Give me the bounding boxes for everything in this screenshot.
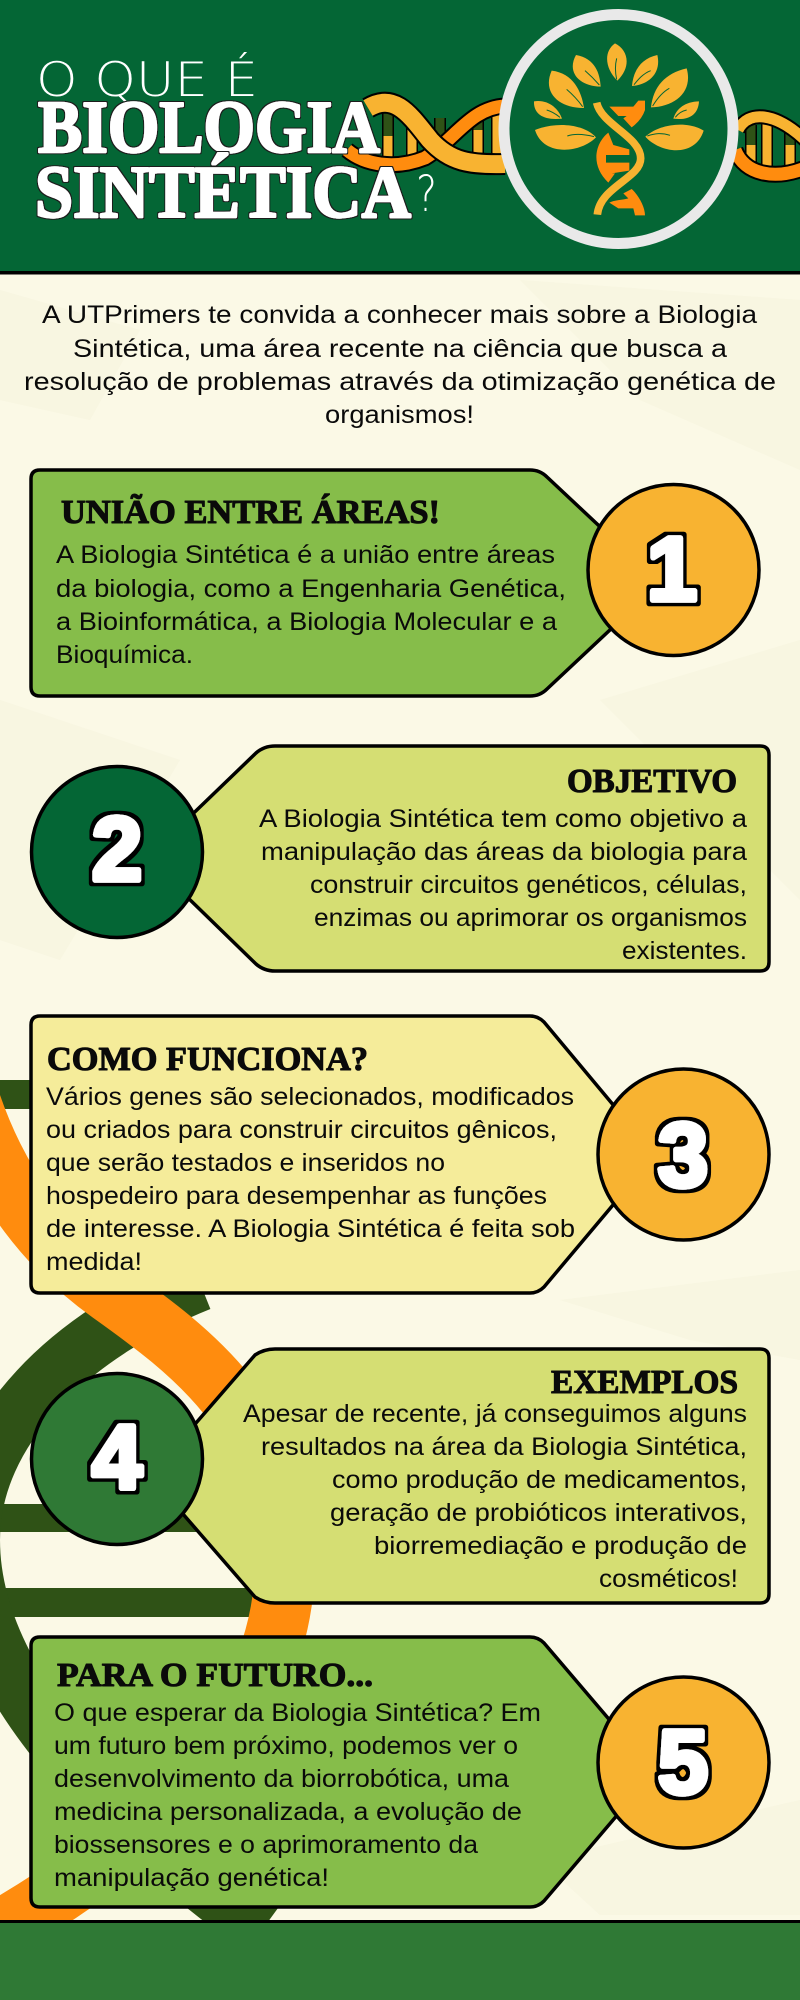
title <box>35 53 437 234</box>
panel 5: para o futuro <box>31 1637 769 1907</box>
number badge 3 <box>598 1069 769 1240</box>
body text 2: construir circuitos genéticos, células, <box>310 871 747 899</box>
body text 2: enzimas ou aprimorar os organismos <box>314 904 747 932</box>
panel 2: objetivo <box>32 746 769 971</box>
body text 4: resultados na área da Biologia Sintética, <box>261 1433 747 1461</box>
intro text: A UTPrimers te convida a conhecer mais sobre a Biologia <box>42 301 757 329</box>
body text 5: manipulação genética! <box>54 1864 329 1892</box>
body text 1 <box>56 541 566 669</box>
panel 1: união entre áreas <box>31 470 759 696</box>
body text 3: de interesse. A Biologia Sintética é feita sob <box>46 1215 575 1243</box>
body text 3: hospedeiro para desempenhar as funções <box>46 1182 547 1210</box>
body text 1: A Biologia Sintética é a união entre áreas <box>56 541 555 569</box>
number badge 5: 5 <box>658 1713 708 1813</box>
body text 3: ou criados para construir circuitos gênicos, <box>46 1116 557 1144</box>
body text 5: um futuro bem próximo, podemos ver o <box>54 1732 518 1760</box>
body text 4 <box>243 1400 747 1593</box>
body text 2: existentes. <box>622 937 747 965</box>
title: SINTÉTICA <box>35 152 411 234</box>
body text 1: a Bioinformática, a Biologia Molecular e a <box>56 608 557 636</box>
body text 2: A Biologia Sintética tem como objetivo a <box>259 805 747 833</box>
title: ? <box>416 165 437 223</box>
header band <box>0 0 800 274</box>
header DNA helix illustration <box>347 103 800 175</box>
logo badge: tree with DNA trunk <box>504 14 733 244</box>
body text 5: desenvolvimento da biorrobótica, uma <box>54 1765 509 1793</box>
background DNA helix <box>0 1080 300 1945</box>
heading 2: OBJETIVO <box>567 763 737 800</box>
number badge 5 <box>598 1677 769 1848</box>
title: BIOLOGIA <box>38 87 380 169</box>
intro text: organismos! <box>325 401 474 429</box>
heading 5: PARA O FUTURO... <box>57 1657 373 1694</box>
number badge 1: 1 <box>647 520 697 620</box>
body text 4: como produção de medicamentos, <box>332 1466 747 1494</box>
heading 3: COMO FUNCIONA? <box>47 1041 368 1078</box>
panel 4: exemplos <box>32 1349 769 1603</box>
number badge 3: 3 <box>658 1106 708 1206</box>
body text 5: medicina personalizada, a evolução de <box>54 1798 522 1826</box>
number badge 2 <box>32 766 202 938</box>
body text 2: manipulação das áreas da biologia para <box>261 838 747 866</box>
number badge 4: 4 <box>92 1408 142 1508</box>
body text 5 <box>54 1699 541 1892</box>
body text 3: medida! <box>46 1248 142 1276</box>
number badge 1 <box>588 484 759 656</box>
number badge 4 <box>32 1374 202 1544</box>
body text 4: cosméticos! <box>599 1565 738 1593</box>
heading 1: UNIÃO ENTRE ÁREAS! <box>61 494 440 531</box>
panel 3: como funciona <box>31 1016 769 1293</box>
body text 4: geração de probióticos interativos, <box>330 1499 747 1527</box>
body text 3: que serão testados e inseridos no <box>46 1149 445 1177</box>
title: O QUE É <box>36 53 258 108</box>
body text 1: da biologia, como a Engenharia Genética, <box>56 575 566 603</box>
body text 5: biossensores e o aprimoramento da <box>54 1831 478 1859</box>
body text 4: biorremediação e produção de <box>374 1532 747 1560</box>
body text 3: Vários genes são selecionados, modificados <box>46 1083 574 1111</box>
body text 2 <box>259 805 747 965</box>
body text 5: O que esperar da Biologia Sintética? Em <box>54 1699 541 1727</box>
intro text: Sintética, uma área recente na ciência que busca a <box>73 335 727 363</box>
footer band <box>0 1920 800 2000</box>
intro text: resolução de problemas através da otimização genética de <box>24 368 776 396</box>
body text 4: Apesar de recente, já conseguimos alguns <box>243 1400 747 1428</box>
heading 4: EXEMPLOS <box>551 1364 738 1401</box>
number badge 2: 2 <box>92 800 142 900</box>
body text 3 <box>46 1083 575 1276</box>
body text 1: Bioquímica. <box>56 641 193 669</box>
intro text <box>24 301 776 429</box>
